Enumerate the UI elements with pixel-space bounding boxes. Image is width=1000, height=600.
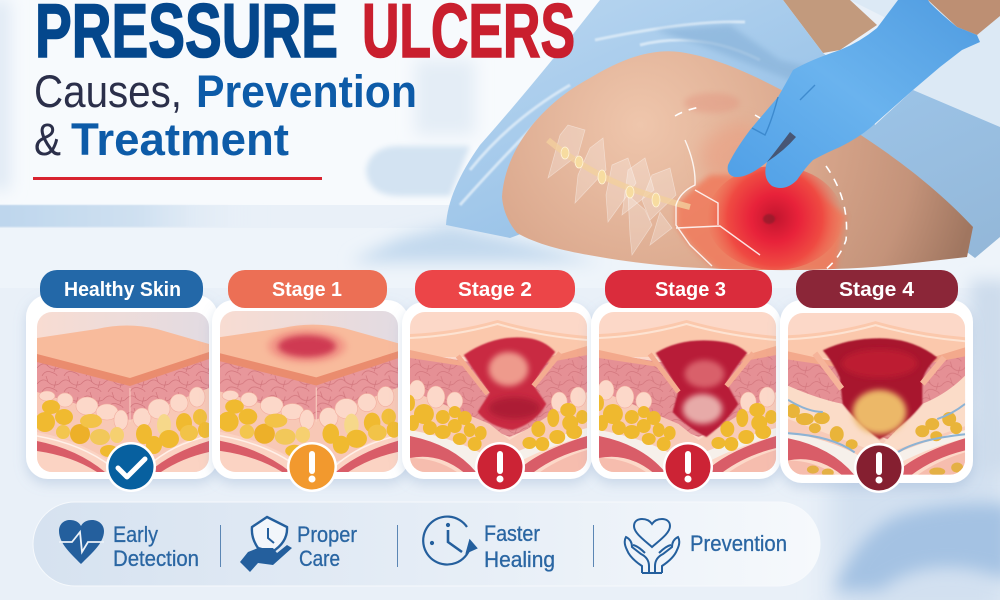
wound redness	[676, 93, 846, 272]
card: stage 2: Stage 2	[458, 279, 532, 301]
card: stage 3	[591, 270, 781, 492]
label: proper care: Proper	[297, 522, 357, 547]
subtitle: Causes,	[34, 66, 182, 117]
label: prevention: Prevention	[690, 531, 787, 556]
icon: heart with pulse	[59, 520, 104, 564]
card: healthy skin: Healthy Skin	[64, 279, 181, 301]
subtitle: Prevention	[196, 66, 417, 117]
subtitle: Treatment	[71, 114, 289, 165]
right side sheet	[850, 0, 1000, 132]
label: proper care	[297, 522, 357, 571]
label: faster healing	[484, 521, 555, 572]
stage cards	[26, 270, 973, 493]
label: early detection: Early	[113, 522, 158, 547]
glove	[728, 0, 980, 188]
bedding folds bottom right	[830, 420, 1000, 600]
icon: clock	[423, 517, 476, 565]
card: stage 4: Stage 4	[839, 279, 915, 301]
spine overlay	[548, 125, 760, 266]
dashed circle	[675, 107, 847, 270]
skin	[502, 51, 973, 270]
title	[33, 0, 575, 180]
title underline	[33, 177, 322, 180]
panel: benefits bar	[33, 502, 820, 586]
subtitle	[34, 66, 417, 165]
label: faster healing: Faster	[484, 521, 540, 546]
label: proper care: Care	[299, 546, 340, 571]
label: faster healing: Healing	[484, 547, 555, 572]
card: stage 2	[402, 270, 592, 492]
label: early detection: Detection	[113, 546, 199, 571]
card: stage 1	[212, 270, 409, 492]
card: stage 1: Stage 1	[272, 279, 342, 301]
background skin behind gown	[783, 0, 877, 53]
card: stage 4	[780, 270, 973, 493]
card: healthy skin	[26, 270, 218, 492]
icon: shield and hand	[240, 517, 292, 572]
patient gown	[446, 0, 1000, 258]
pillow	[366, 146, 470, 196]
icon: hands with heart	[625, 519, 679, 573]
illustration: patient and gloved hand	[366, 0, 1000, 272]
subtitle: &	[34, 114, 61, 165]
card: stage 3: Stage 3	[655, 279, 726, 301]
label: early detection	[113, 522, 199, 571]
arm	[928, 0, 1000, 35]
